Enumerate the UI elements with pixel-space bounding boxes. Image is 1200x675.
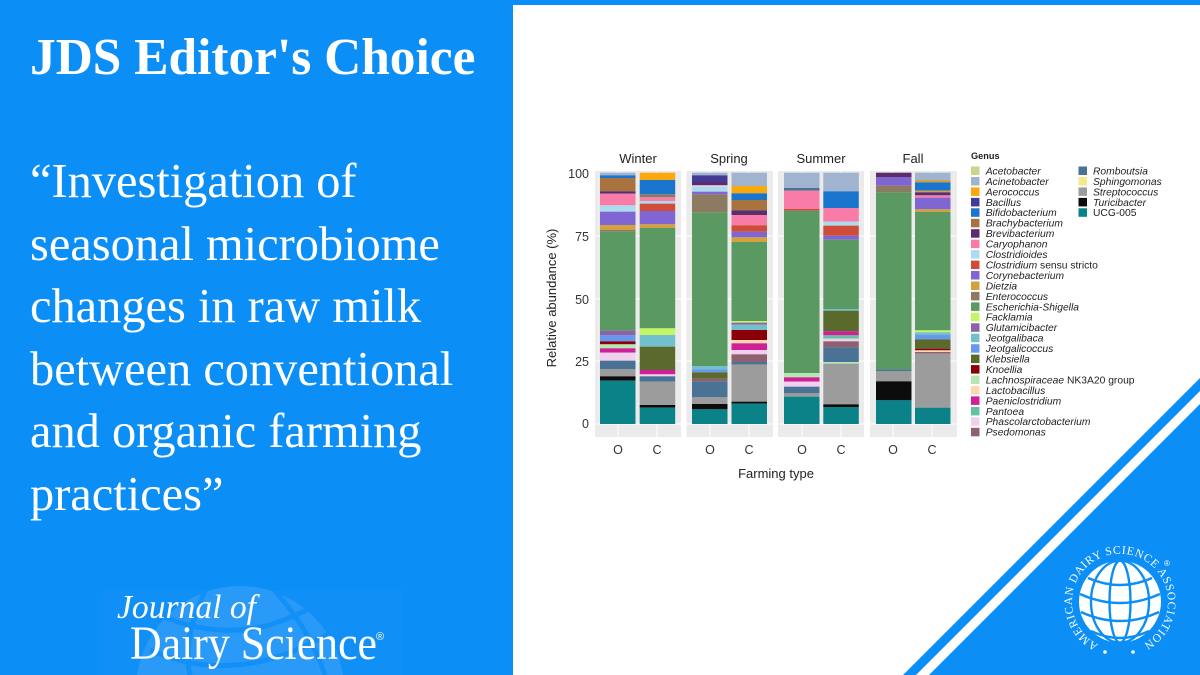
bar: Fall conventional: [915, 173, 950, 424]
panel: Fall: Fall: [903, 151, 924, 166]
bar: Winter conventional: [640, 173, 675, 424]
panel: Summer: [778, 151, 864, 457]
legend: Genus: Phascolarctobacterium: [986, 417, 1091, 428]
legend: Genus: Turicibacter: [1093, 198, 1147, 209]
bar: Summer organic: [784, 173, 820, 424]
legend: Genus: Enterococcus: [986, 292, 1048, 303]
article quote: seasonal microbiome: [30, 218, 440, 271]
panel: Summer: C: [836, 443, 846, 457]
legend: Genus: Glutamicibacter: [986, 323, 1058, 334]
logo: American Dairy Science Association seal: AMERICAN DAIRY SCIENCE ASSOCIATION: [1064, 546, 1176, 650]
article quote: practices”: [30, 468, 223, 521]
bar: Winter organic: [600, 173, 636, 424]
article quote: “Investigation of: [30, 155, 357, 208]
legend: Genus: Brachybacterium: [986, 219, 1063, 230]
legend: Genus: Brevibacterium: [986, 229, 1055, 240]
legend: Genus: Acinetobacter: [985, 177, 1049, 188]
logo: American Dairy Science Association seal: ®: [1164, 559, 1170, 568]
legend: Genus: Jeotgalibaca: [985, 334, 1044, 345]
y axis labels: 50: [575, 293, 589, 307]
y axis labels: 0: [582, 417, 589, 431]
legend: Genus: Escherichia-Shigella: [986, 302, 1079, 313]
legend: Genus: Pantoea: [986, 407, 1024, 418]
x axis title: Farming type: [738, 466, 814, 481]
panel: Spring: [686, 151, 773, 457]
article quote: changes in raw milk: [30, 280, 421, 333]
panel: Winter: [595, 151, 681, 457]
panel: Summer: O: [797, 443, 807, 457]
y axis labels: 75: [575, 230, 589, 244]
bar: Fall organic: [876, 173, 912, 424]
y axis labels: 25: [575, 355, 589, 369]
legend: Genus: Genus: [971, 151, 1000, 161]
panel: Spring: O: [705, 443, 715, 457]
legend: Genus: Bacillus: [986, 198, 1021, 209]
legend: Genus: UCG-005: [1093, 208, 1137, 219]
panel: blue left column: [0, 0, 513, 675]
legend: Genus: Streptococcus: [1093, 187, 1158, 198]
legend: Genus: Clostridium sensu stricto: [986, 260, 1098, 272]
legend: Genus: Knoellia: [986, 365, 1023, 376]
panel: Spring: Spring: [710, 151, 748, 166]
chart: relative abundance by season and farming type: [544, 151, 1162, 481]
bar: Spring conventional: [732, 173, 767, 424]
bar: Spring organic: [692, 173, 728, 424]
legend: Genus: Romboutsia: [1093, 166, 1148, 177]
y axis labels: 100: [568, 167, 589, 181]
article quote: between conventional: [30, 343, 453, 396]
article quote: and organic farming: [30, 405, 421, 458]
legend: Genus: Facklamia: [986, 313, 1033, 324]
panel: Fall: [870, 151, 957, 457]
bar: Summer conventional: [823, 173, 859, 424]
legend: Genus: Psedomonas: [986, 428, 1046, 439]
panel: Summer: Summer: [796, 151, 846, 166]
panel: Winter: Winter: [619, 151, 657, 166]
top blue band: [513, 0, 1200, 5]
legend: Genus: Caryophanon: [986, 240, 1048, 251]
legend: Genus: Lactobacillus: [986, 386, 1045, 397]
y axis title: Relative abundance (%): [544, 229, 559, 367]
legend: Genus: Sphingomonas: [1093, 177, 1162, 188]
legend: Genus: Clostridioides: [986, 250, 1048, 261]
panel: Winter: O: [613, 443, 623, 457]
panel: Spring: C: [744, 443, 754, 457]
legend: Genus: Paeniclostridium: [986, 396, 1062, 407]
legend: Genus: Klebsiella: [986, 354, 1030, 366]
legend: Genus: Corynebacterium: [986, 271, 1065, 282]
logo: Journal of Dairy Science: ®: [376, 631, 384, 643]
logo: Journal of Dairy Science: [103, 586, 403, 675]
legend: Genus: Aerococcus: [985, 187, 1040, 198]
legend: Genus: [971, 151, 1162, 439]
legend: Genus: Bifidobacterium: [986, 208, 1057, 219]
legend: Genus: Dietzia: [986, 281, 1017, 292]
y axis labels: [568, 167, 589, 431]
legend: Genus: Lachnospiraceae NK3A20 group: [986, 375, 1135, 386]
article quote: [30, 155, 453, 521]
panel: Winter: C: [652, 443, 662, 457]
legend: Genus: Jeotgalicoccus: [985, 344, 1053, 355]
title: JDS Editor's Choice: [30, 29, 475, 86]
panel: Fall: O: [888, 443, 898, 457]
legend: Genus: Acetobacter: [985, 166, 1041, 177]
logo: Journal of Dairy Science: Journal of: [117, 589, 261, 626]
logo: Journal of Dairy Science: Dairy Science: [130, 617, 377, 670]
corner: diagonal blue triangle with stripe: [903, 378, 1200, 675]
panel: Fall: C: [927, 443, 937, 457]
